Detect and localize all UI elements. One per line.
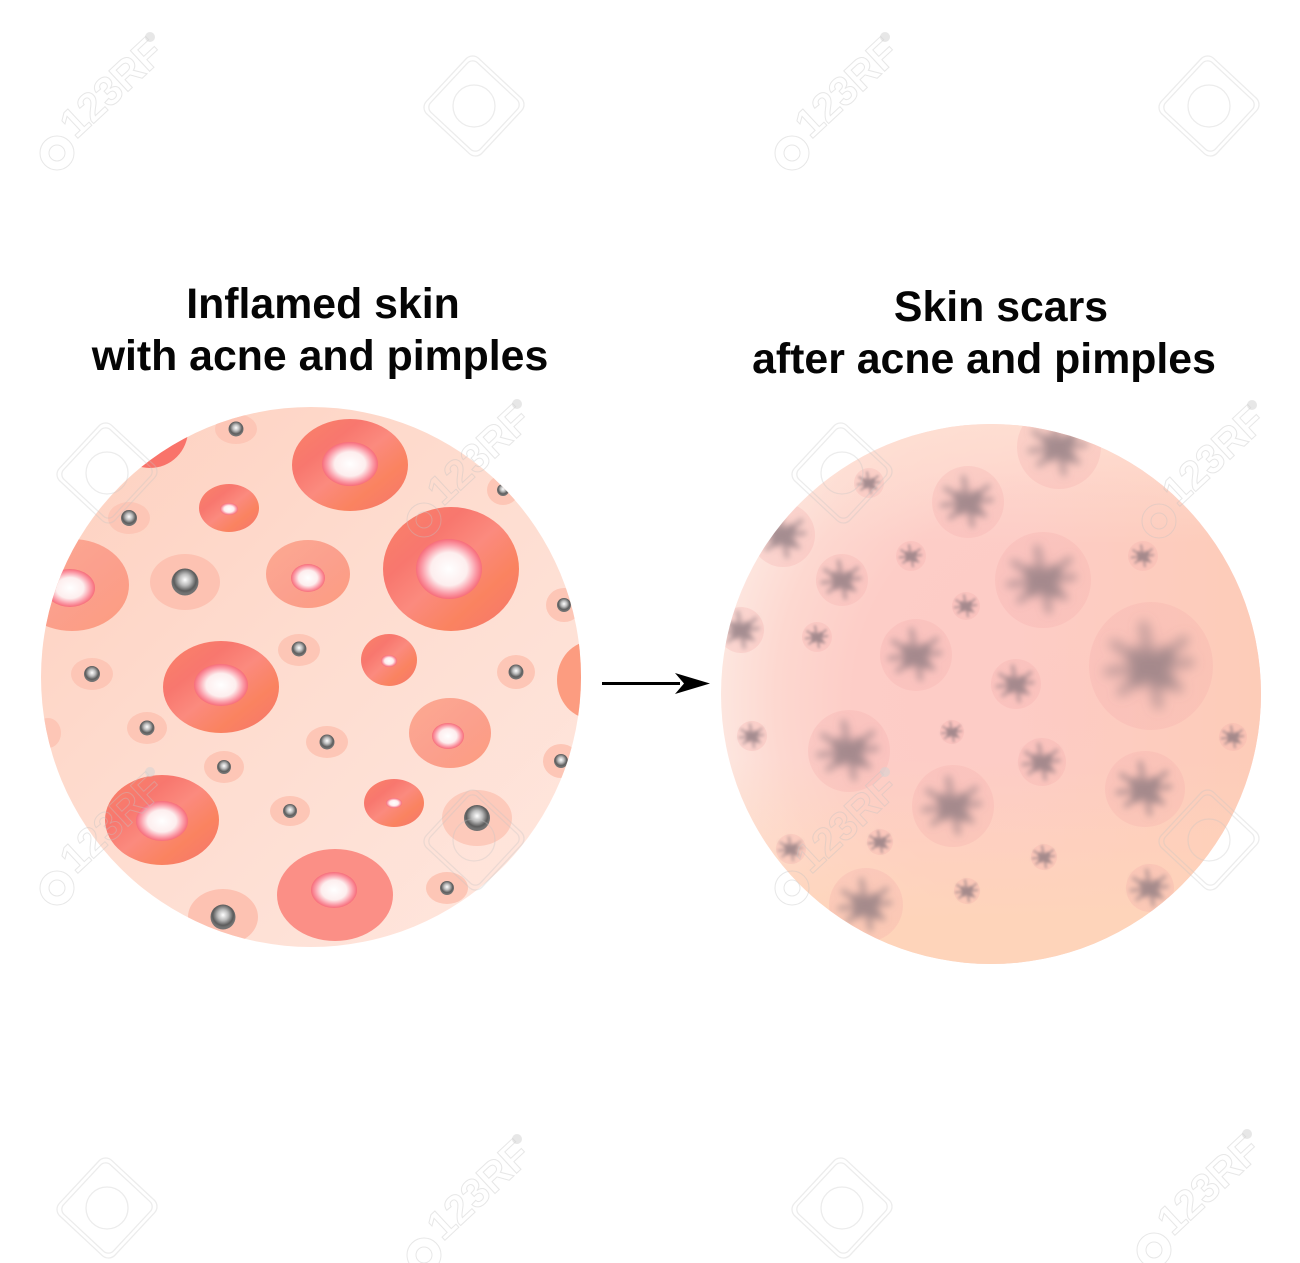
blackhead 10	[306, 726, 348, 758]
heading: skin scars: Skin scars	[894, 283, 1108, 331]
arrow: from inflamed skin to scars	[602, 673, 710, 694]
scar 26	[829, 868, 903, 942]
scar 13: largest	[1089, 602, 1213, 730]
scar 1	[1017, 426, 1101, 489]
scar 23	[867, 829, 893, 855]
pimple: small upper left	[199, 484, 259, 532]
scar 3	[854, 468, 884, 498]
panel: skin scars circle	[718, 405, 1261, 964]
heading: inflamed skin: with acne and pimples	[91, 332, 548, 380]
heading: skin scars: after acne and pimples	[752, 335, 1216, 383]
pimple: lower left	[105, 775, 219, 865]
blackhead 7	[546, 588, 574, 622]
blackhead 5	[71, 658, 113, 690]
blackhead 17	[44, 718, 61, 748]
pimple: bottom centre	[277, 849, 393, 941]
scar 6	[896, 541, 926, 571]
panel: inflamed skin circle	[41, 407, 581, 947]
scar 2	[932, 466, 1004, 538]
scar 10	[718, 607, 764, 653]
blackhead 14	[543, 744, 572, 778]
skin background	[721, 424, 1261, 964]
scar 20	[1105, 751, 1185, 827]
blackhead 8	[487, 478, 515, 505]
blackhead 9	[127, 712, 167, 744]
heading: inflamed skin	[91, 280, 548, 380]
scar 7	[995, 532, 1091, 628]
scar 22	[776, 834, 806, 864]
scar 16	[940, 720, 964, 744]
pimple: soft upper centre	[266, 540, 350, 608]
scar 11	[802, 622, 832, 652]
scar 5	[816, 554, 868, 606]
scars	[718, 405, 1247, 942]
heading: skin scars	[752, 283, 1216, 383]
blackhead 4	[278, 634, 320, 666]
blackhead 13	[442, 790, 512, 846]
pimple: top centre	[292, 419, 408, 511]
blackhead 12	[270, 796, 310, 826]
pimples and blackheads	[44, 416, 581, 941]
scar 12	[880, 619, 952, 691]
heading: inflamed skin: Inflamed skin	[186, 280, 460, 328]
blackhead 3	[150, 554, 220, 610]
scar 14	[991, 659, 1041, 709]
skin background	[41, 407, 581, 947]
scar 21	[1219, 723, 1247, 751]
pimple: right edge	[557, 644, 581, 716]
scar 8	[1128, 541, 1158, 571]
pimple: top left edge	[142, 437, 188, 468]
pimple: small centre	[361, 634, 417, 686]
blackhead 15	[426, 872, 468, 904]
pimple: middle left	[163, 641, 279, 733]
scar 18	[1018, 738, 1066, 786]
pimple: left edge	[46, 540, 129, 631]
scar 25	[954, 878, 980, 904]
scar 17	[737, 721, 767, 751]
blackhead 11	[204, 751, 244, 783]
scar 4	[759, 506, 815, 567]
pimple: largest right	[383, 507, 519, 631]
pimple: small lower centre	[364, 779, 424, 827]
scar 19	[912, 765, 994, 847]
blackhead 16	[188, 889, 258, 939]
blackhead 2	[108, 502, 150, 534]
scar 24	[1031, 844, 1057, 870]
blackhead 6	[497, 655, 535, 689]
blackhead 1	[215, 414, 257, 444]
pimple: soft lower right	[409, 698, 491, 768]
scar 15	[808, 710, 890, 792]
scar 27	[1126, 864, 1174, 912]
scar 9	[952, 592, 980, 620]
